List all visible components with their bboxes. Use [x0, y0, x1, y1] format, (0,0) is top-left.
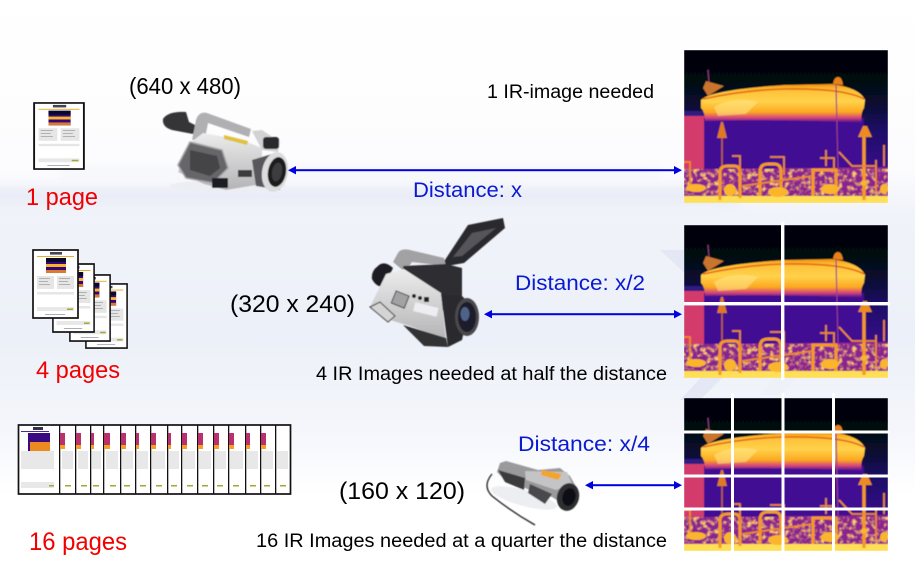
resolution label 320 x 240: (320 x 240): [230, 291, 355, 318]
label: distance x/4: Distance: x/4: [518, 433, 650, 456]
arrow: distance x/2: [484, 310, 682, 318]
resolution label 160 x 120: (160 x 120): [339, 478, 465, 505]
label: 4 pages: 4 pages: [36, 357, 120, 384]
resolution label 640 x 480: (640 x 480): [129, 73, 241, 99]
camera: 640 x 480: [163, 112, 291, 194]
document: 1 page: [34, 103, 84, 169]
document strip: 16 pages: [18, 425, 290, 494]
label: 16 pages: 16 pages: [29, 528, 127, 556]
label: distance x/2: Distance: x/2: [515, 272, 645, 295]
label: 1 page: 1 page: [26, 184, 98, 211]
arrow: distance x/4: [585, 481, 682, 489]
thermal image: whole tank: [684, 50, 888, 203]
thermal image: 16 tiles: [684, 393, 890, 551]
label: 16 IR images needed: 16 IR Images needed at a quarter the distance: [256, 531, 667, 552]
arrow: distance x: [288, 166, 682, 174]
thermal image: 4 tiles: [684, 222, 890, 380]
document stack: 4 pages: [33, 250, 127, 348]
camera: 320 x 240: [370, 218, 505, 347]
label: 1 IR image needed: 1 IR-image needed: [487, 82, 654, 103]
label: 4 IR images needed: 4 IR Images needed at half the distance: [316, 364, 667, 385]
label: distance x: Distance: x: [413, 179, 523, 202]
camera: 160 x 120: [487, 461, 582, 525]
